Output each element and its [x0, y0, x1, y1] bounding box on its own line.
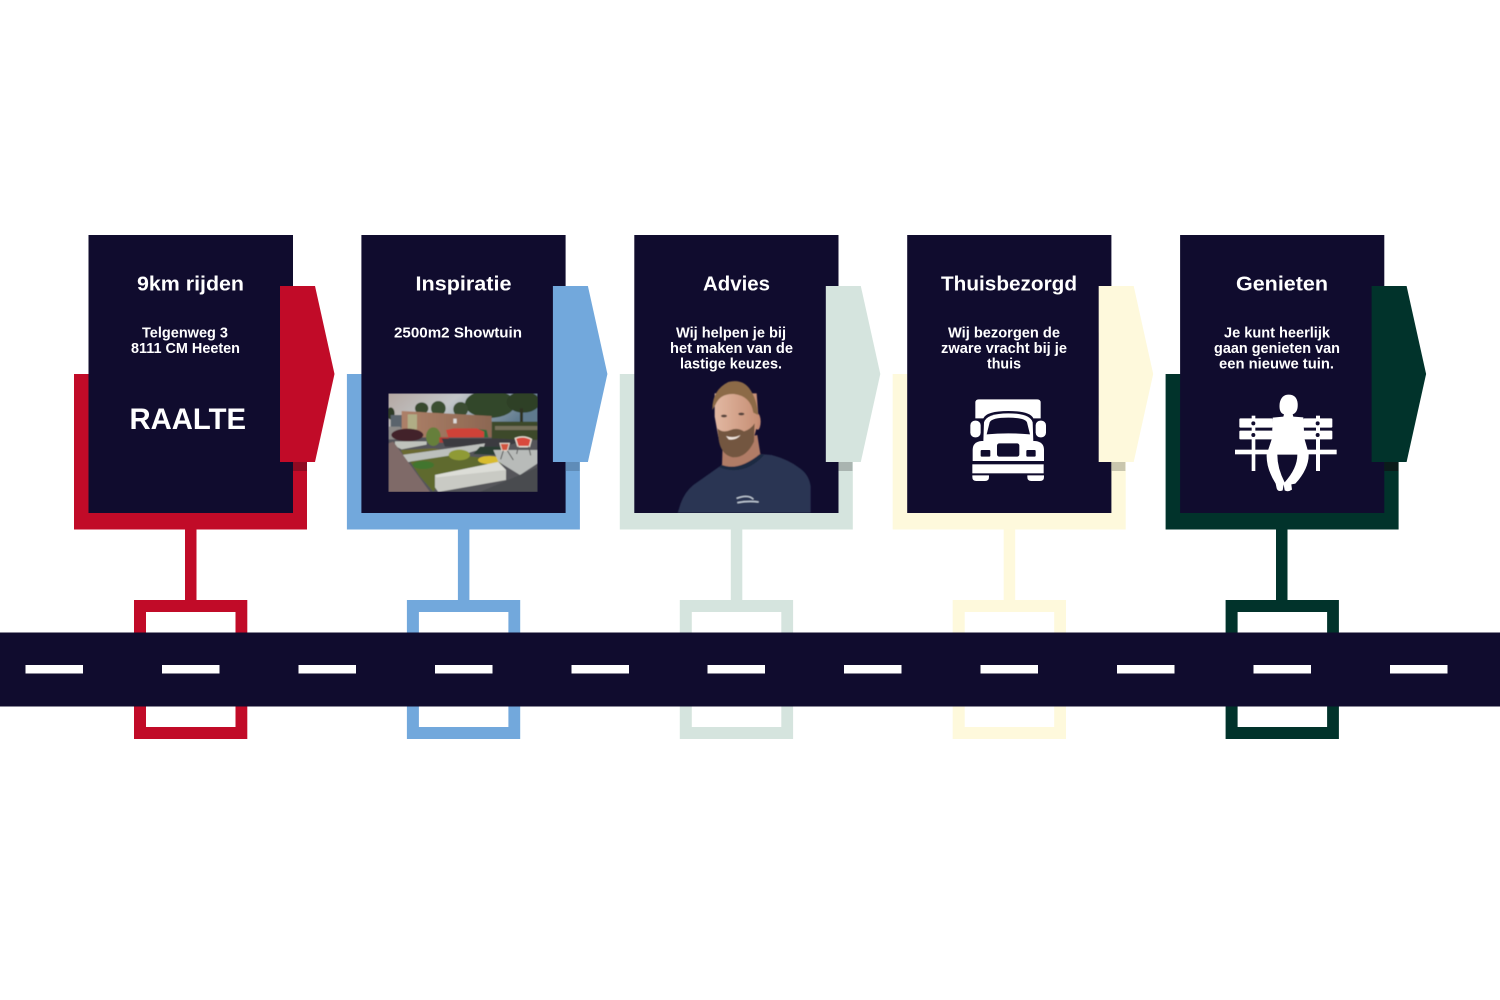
text: advies description: Wij helpen je bij — [676, 326, 786, 342]
address text: Telgenweg 3 — [142, 326, 228, 342]
photo: show garden — [387, 390, 540, 492]
panel: Inspiratie — [361, 235, 607, 513]
connector: mint frame and road clamp — [620, 374, 853, 739]
text: advies description: lastige keuzes. — [680, 356, 782, 372]
arrow: mint — [826, 286, 880, 471]
panel: 9km rijden — [88, 235, 334, 513]
connector: green frame and road clamp — [1166, 374, 1399, 739]
arrow: red — [280, 286, 334, 471]
text: delivery description: zware vracht bij je — [941, 341, 1067, 357]
text: delivery description — [941, 326, 1067, 372]
panel: Thuisbezorgd — [907, 235, 1153, 513]
address text — [131, 326, 240, 357]
panel: Genieten — [1180, 235, 1426, 513]
arrow: blue — [553, 286, 607, 471]
text: enjoy description: Je kunt heerlijk — [1224, 326, 1331, 342]
arrow: cream — [1099, 286, 1153, 471]
address text: 8111 CM Heeten — [131, 341, 240, 357]
heading: Advies: Advies — [703, 274, 770, 296]
text: enjoy description — [1214, 326, 1340, 372]
icon: truck — [970, 399, 1046, 481]
text: enjoy description: een nieuwe tuin. — [1219, 356, 1334, 372]
connector: blue frame and road clamp — [347, 374, 580, 739]
arrow: dark green — [1372, 286, 1426, 471]
road with lane markings — [0, 632, 1500, 706]
icon: person on bench — [1235, 395, 1337, 491]
place name: RAALTE: RAALTE — [130, 403, 246, 436]
text: delivery description: Wij bezorgen de — [948, 326, 1060, 342]
text: showtuin: 2500m2 Showtuin — [394, 326, 522, 342]
text: delivery description: thuis — [987, 356, 1021, 372]
text: enjoy description: gaan genieten van — [1214, 341, 1340, 357]
heading: Genieten: Genieten — [1236, 274, 1328, 296]
heading: Thuisbezorgd: Thuisbezorgd — [941, 274, 1077, 296]
photo: advisor portrait — [677, 381, 811, 514]
connector: red frame and road clamp — [74, 374, 307, 739]
panel: Advies — [634, 235, 880, 514]
connector: cream frame and road clamp — [893, 374, 1126, 739]
heading: Inspiratie: Inspiratie — [416, 274, 512, 296]
text: advies description: het maken van de — [670, 341, 793, 357]
heading: 9km rijden: 9km rijden — [137, 274, 244, 296]
text: advies description — [670, 326, 793, 372]
